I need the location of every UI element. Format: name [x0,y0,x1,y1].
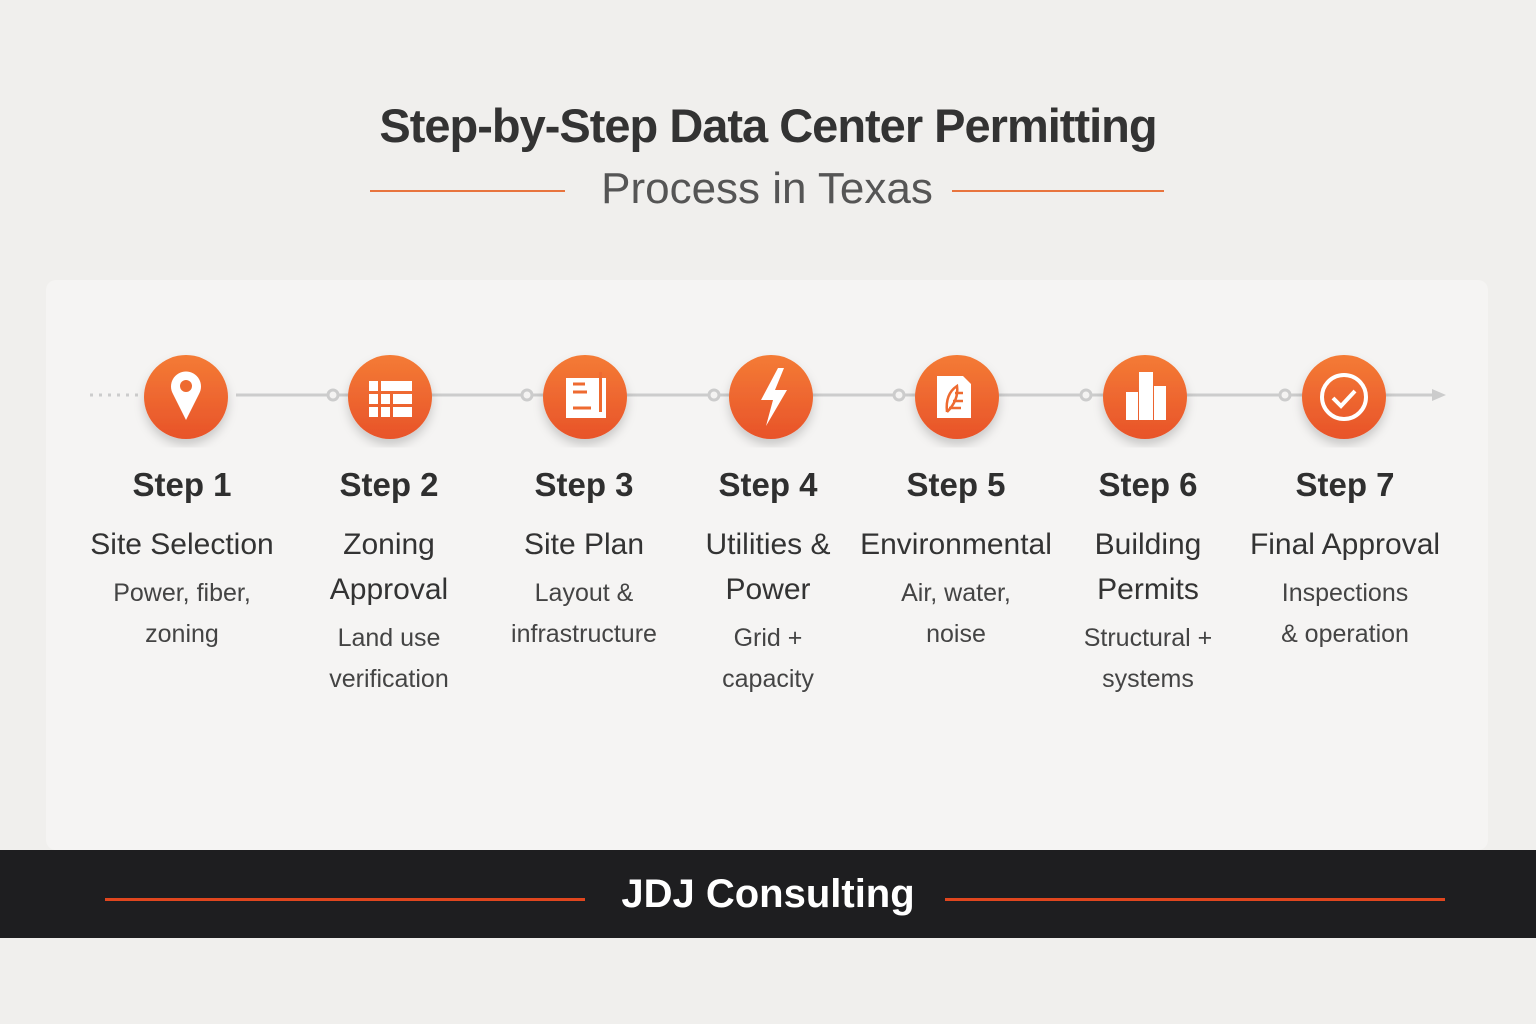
step 3 [511,466,657,648]
step 1: Step 1 [132,466,232,503]
step 7: Final Approval [1250,528,1440,561]
panel: timeline card [46,280,1488,850]
title: Step-by-Step Data Center Permitting [379,99,1157,152]
step 4: Grid + [734,624,802,652]
icon: bolt [761,368,787,426]
step 6: Building [1095,528,1201,561]
timeline [90,355,1446,448]
step 4: Utilities & [705,528,831,561]
step 7: & operation [1281,620,1409,648]
step 3: Layout & [535,579,633,607]
step 6: Permits [1097,573,1199,606]
icon: pin [171,372,201,420]
step 2: Zoning [343,528,435,561]
step 1: Power, fiber, [113,579,251,607]
subtitle: Process in Texas [601,164,933,213]
step 4: Power [725,573,811,606]
step 2 [329,466,449,693]
step 5: Step 5 [906,466,1006,503]
step 2: Step 2 [339,466,439,503]
step 5: Air, water, [901,579,1011,607]
step 3: Step 3 [534,466,634,503]
step 7 [1250,466,1440,648]
step 5: Environmental [860,528,1052,561]
step 4: Step 4 [718,466,818,503]
step 1 [90,466,274,648]
step 5: noise [926,620,986,648]
step 7: Inspections [1282,579,1408,607]
icon: check [1322,375,1366,419]
step 2: Land use [338,624,440,652]
icon: site plan [566,372,606,418]
step 4: capacity [722,665,814,693]
icon: document leaf [937,376,971,418]
footer brand: JDJ Consulting [621,872,915,916]
step 1: Site Selection [90,528,274,561]
step 3: Site Plan [524,528,644,561]
icon: buildings [1126,372,1166,420]
step 3: infrastructure [511,620,657,648]
step 5 [860,466,1052,648]
step 4 [705,466,831,693]
step 6: Structural + [1084,624,1212,652]
step 6: Step 6 [1098,466,1198,503]
icon: grid [369,381,412,417]
footer band [0,850,1536,938]
step 6: systems [1102,665,1194,693]
step 2: verification [329,665,449,693]
step 6 [1084,466,1212,693]
step 1: zoning [145,620,219,648]
step 7: Step 7 [1295,466,1395,503]
step 2: Approval [330,573,448,606]
